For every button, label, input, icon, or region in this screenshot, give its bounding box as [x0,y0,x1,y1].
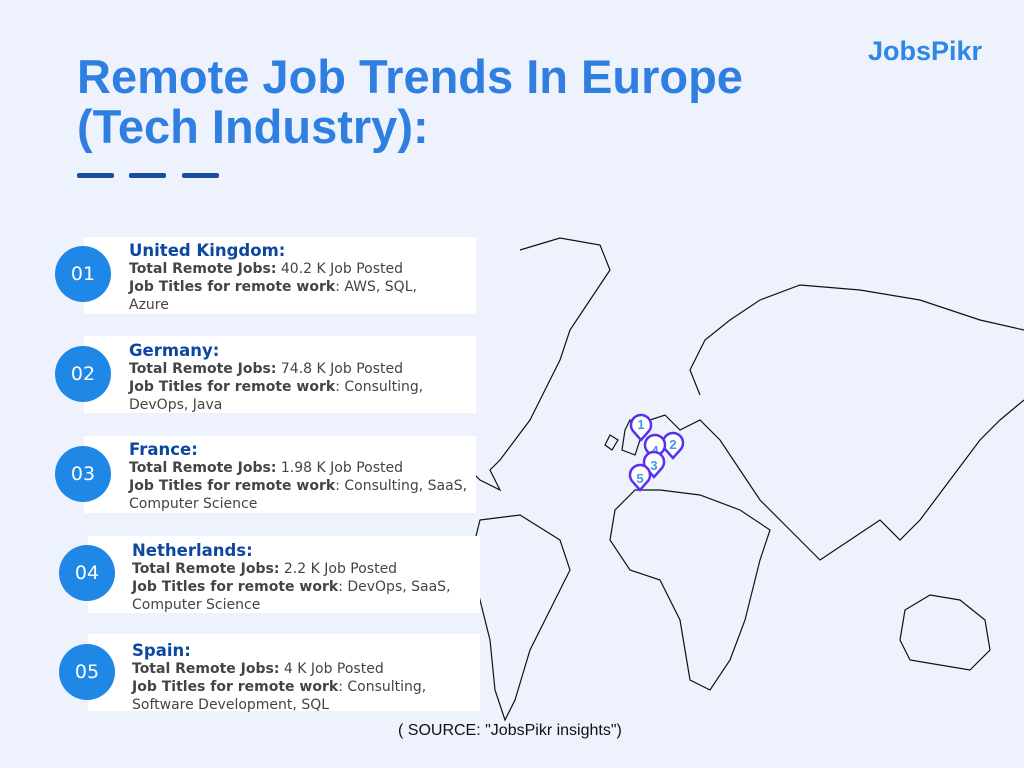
text 4: Computer Science [132,597,260,613]
text 5: Total Remote Jobs: 4 K Job Posted [132,661,384,677]
text 5: Software Development, SQL [132,697,329,713]
text 3: Total Remote Jobs: 1.98 K Job Posted [129,460,403,476]
text 1: Total Remote Jobs: 40.2 K Job Posted [129,261,403,277]
map pins: 4 [651,443,659,458]
text 1: Azure [129,297,169,313]
circle 01: 01 [71,263,95,285]
text 5: Job Titles for remote work: Consulting, [132,679,426,695]
text 3: France: [129,440,198,459]
circle 04 [59,545,115,601]
card 5 [88,634,480,711]
text 3 [128,440,467,512]
title dashes [77,173,219,178]
text 2 [128,341,423,413]
title: (Tech Industry): [77,100,429,153]
card 4 [88,536,480,613]
circle 02 [55,346,111,402]
card 3 [84,436,476,513]
circle 03: 03 [71,463,95,485]
text 2: Germany: [129,341,219,360]
text 4: Netherlands: [132,541,253,560]
text 4 [131,541,451,613]
map pins: 3 [650,458,658,473]
text 1 [128,241,417,313]
title [77,50,743,153]
logo: JobsPikr [868,36,982,66]
map pins: 2 [669,437,677,452]
circle 03 [55,446,111,502]
text 3: Computer Science [129,496,257,512]
text 4: Total Remote Jobs: 2.2 K Job Posted [132,561,397,577]
title: Remote Job Trends In Europe [77,50,743,103]
map pins: 1 [637,417,645,432]
text 1: United Kingdom: [129,241,285,260]
card 1 [84,237,476,314]
circle 05 [59,644,115,700]
map pins: 5 [636,471,644,486]
text 5 [131,641,426,713]
text 4: Job Titles for remote work: DevOps, SaaS, [132,579,451,595]
text 1: Job Titles for remote work: AWS, SQL, [129,279,417,295]
text 2: Job Titles for remote work: Consulting, [129,379,423,395]
text 2: DevOps, Java [129,397,222,413]
text 5: Spain: [132,641,191,660]
circle 05: 05 [75,661,99,683]
text 3: Job Titles for remote work: Consulting, SaaS, [129,478,467,494]
circle 02: 02 [71,363,95,385]
circle 04: 04 [75,562,99,584]
source: ( SOURCE: "JobsPikr insights") [398,722,622,739]
text 2: Total Remote Jobs: 74.8 K Job Posted [129,361,403,377]
circle 01 [55,246,111,302]
card 2 [84,336,476,413]
